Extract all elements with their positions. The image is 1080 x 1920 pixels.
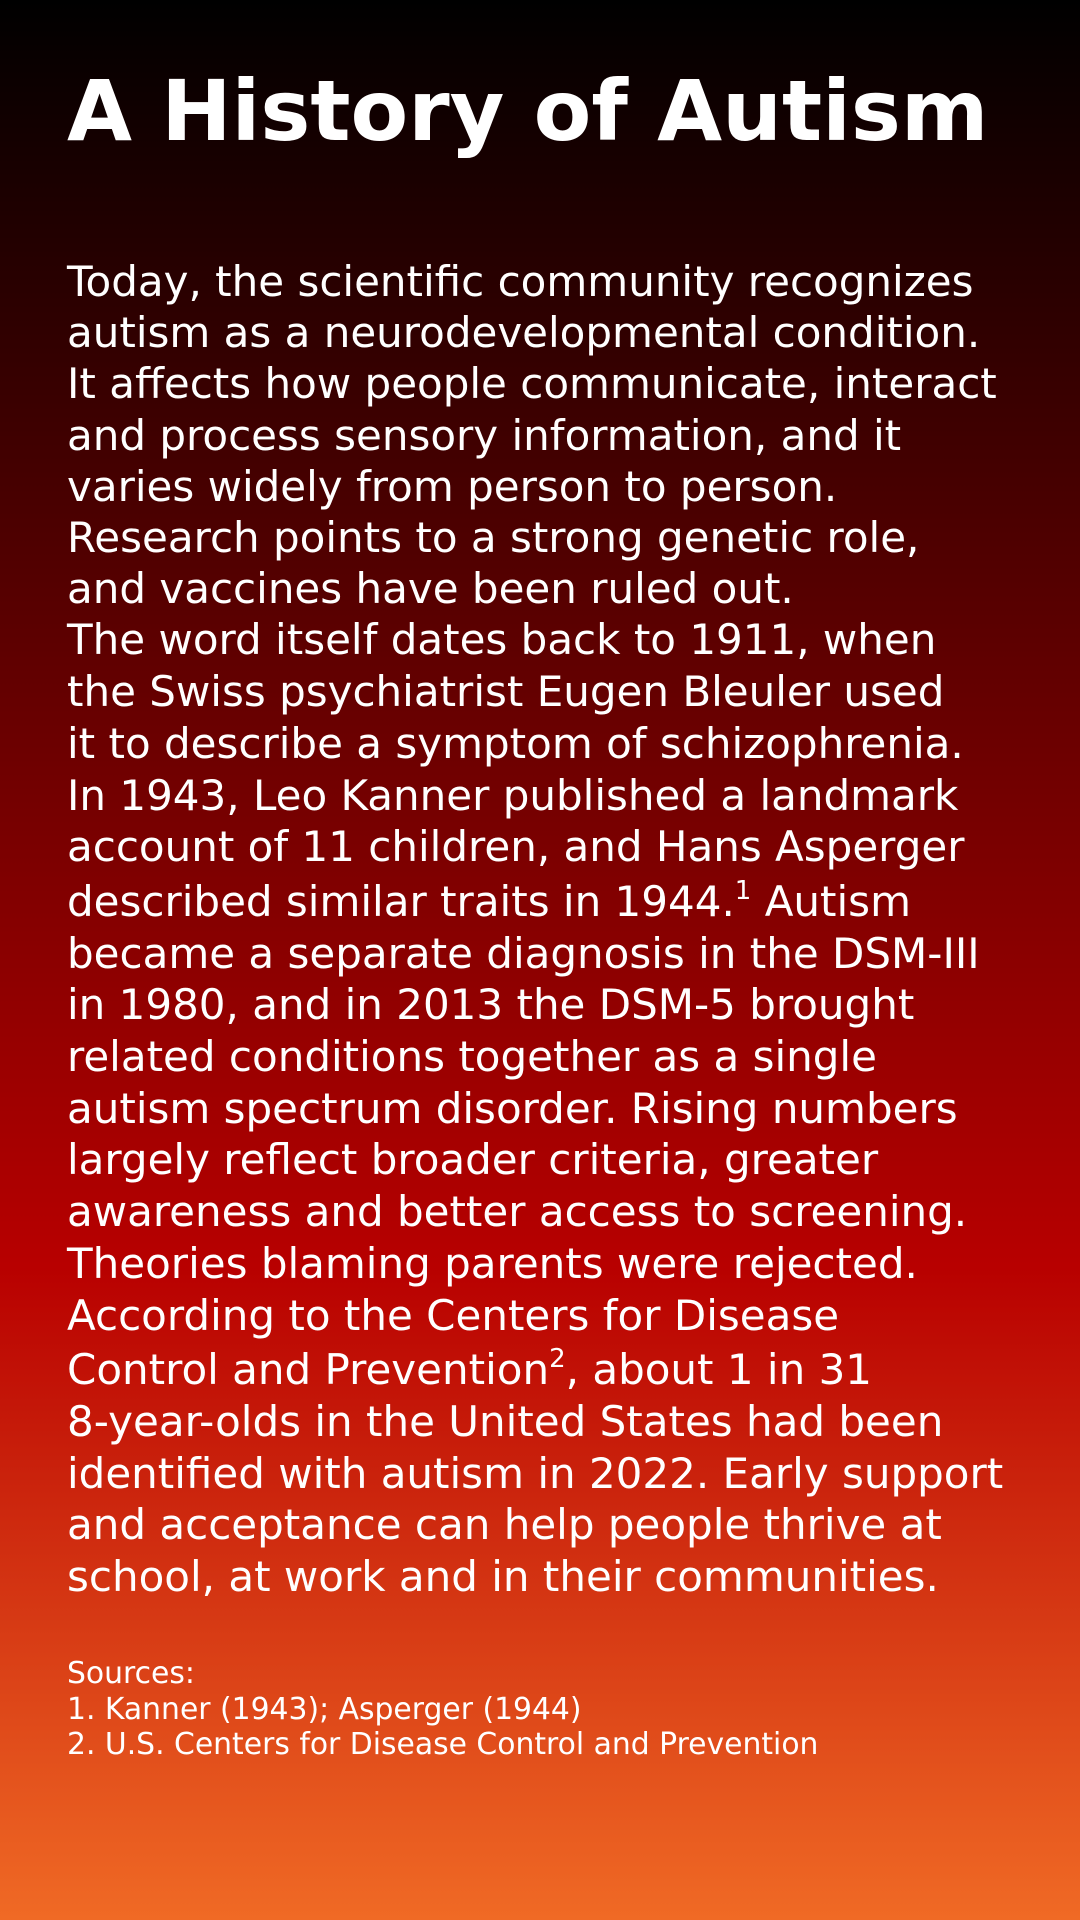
text block: article body: in 1980, and in 2013 the DSM-5 brought [67,980,914,1029]
text block: article body: 8-year-olds in the United States had been [67,1397,943,1446]
text block: article body: According to the Centers for Disease [67,1291,839,1340]
text block: article body: described similar traits in 1944.1 Autism [67,876,911,926]
text block: article body: largely reflect broader criteria, greater [67,1135,878,1184]
text block: article body: autism as a neurodevelopmental condition. [67,308,980,357]
text block: sources [67,1656,818,1762]
text block: article body: In 1943, Leo Kanner published a landmark [67,771,958,820]
text block: article body: Theories blaming parents were rejected. [67,1239,918,1288]
text block: article body: autism spectrum disorder. Rising numbers [67,1084,958,1133]
text block: article body: Research points to a strong genetic role, [67,513,919,562]
text block: article body: it to describe a symptom of schizophrenia. [67,719,964,768]
text block: sources: 1. Kanner (1943); Asperger (1944) [67,1692,582,1726]
title: A History of Autism [67,62,988,160]
text block: article body: and acceptance can help people thrive at [67,1500,942,1549]
text block: article body: Control and Prevention2, about 1 in 31 [67,1344,872,1394]
text block: article body: varies widely from person to person. [67,462,837,511]
text block: article body: related conditions together as a single [67,1032,877,1081]
text block: sources: 2. U.S. Centers for Disease Control and Prevention [67,1727,818,1762]
text block: article body: became a separate diagnosis in the DSM-III [67,929,980,978]
text block: article body: awareness and better access to screening. [67,1187,967,1236]
text block: article body: identified with autism in 2022. Early support [67,1449,1003,1498]
text block: article body: school, at work and in their communities. [67,1552,939,1601]
text block: article body: Today, the scientific community recognizes [67,257,973,306]
text block: article body: and vaccines have been ruled out. [67,564,794,613]
text block: article body: and process sensory information, and it [67,411,901,460]
text block: article body: account of 11 children, and Hans Asperger [67,822,964,871]
text block: article body: the Swiss psychiatrist Eugen Bleuler used [67,667,944,716]
text block: article body: It affects how people communicate, interact [67,359,997,408]
text block: sources: Sources: [67,1656,195,1691]
text block: article body [66,257,1003,1601]
text block: article body: The word itself dates back to 1911, when [67,615,936,664]
